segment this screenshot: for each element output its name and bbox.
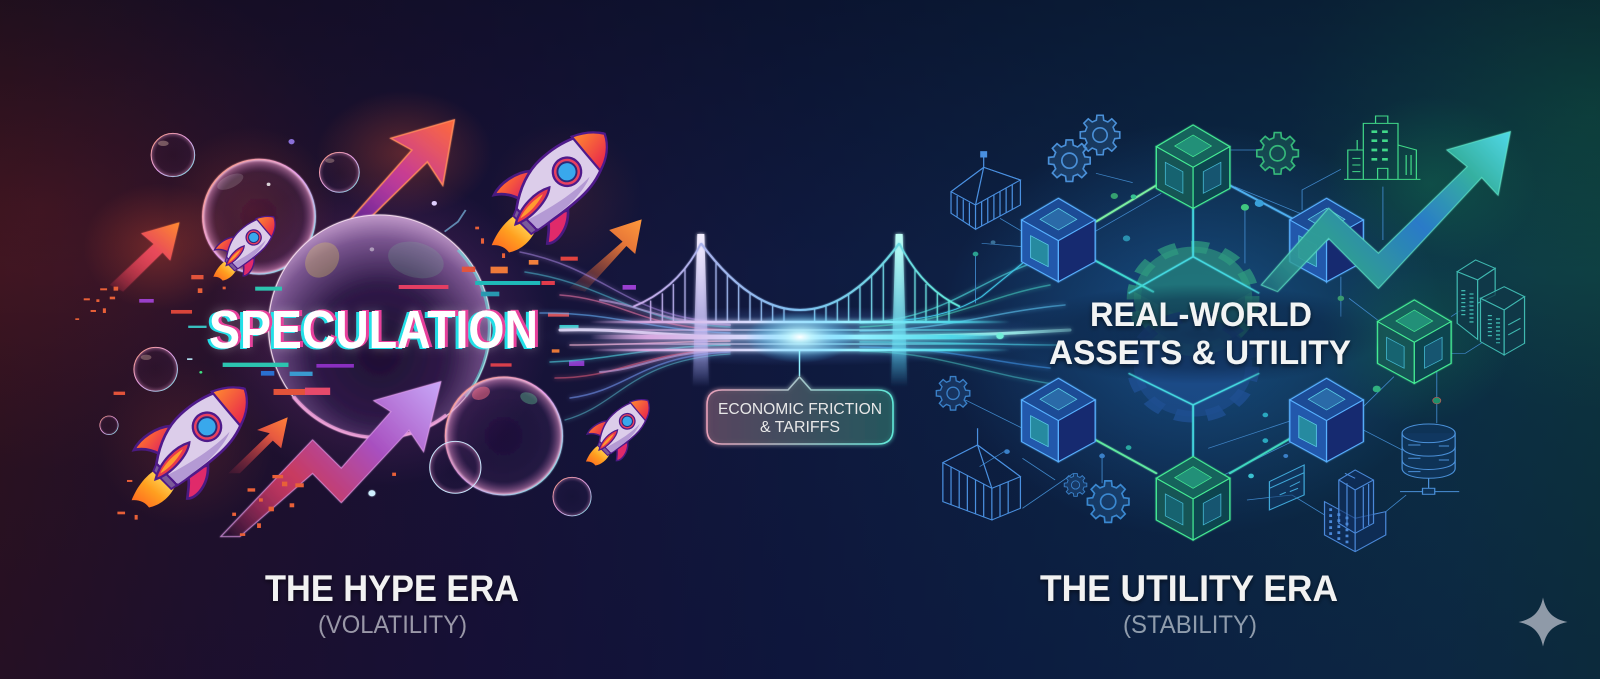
bubble: small top-left: [151, 133, 195, 177]
soft glow: [940, 97, 1537, 537]
bubble: tiny lower-left: [100, 416, 118, 435]
panel: suspension bridge: [633, 234, 960, 387]
callout: economic friction and tariffs: [707, 350, 893, 444]
icon: rocket small right: [573, 384, 661, 478]
icon: document card: [1269, 465, 1304, 510]
bubble: left lower: [134, 347, 177, 391]
cube: lower-left blue: [1022, 378, 1095, 462]
arrow: right upward: [569, 219, 642, 292]
icon: rocket inside bubble: [201, 201, 286, 293]
glow halos: [83, 90, 642, 527]
bridge light band: [540, 306, 1060, 366]
bridge towers: [693, 234, 907, 387]
bubble: small top-centre: [319, 152, 359, 192]
title: the utility era: THE UTILITY ERA: [1040, 568, 1338, 609]
backbone links: [904, 175, 1316, 473]
glitch bars: [114, 257, 636, 395]
icon: shipping container lower: [943, 428, 1020, 520]
icon: rocket top-right: [468, 103, 628, 275]
cube: upper-left blue: [1022, 198, 1095, 282]
sparkle points: [187, 139, 466, 496]
bubble: main speculation bubble: [269, 215, 491, 438]
arrow: zigzag volatile growth: [221, 382, 441, 537]
glow core: [745, 311, 855, 363]
icon: shipping container upper: [951, 152, 1020, 229]
cube: right green: [1378, 300, 1451, 383]
heading: real-world assets and utility: ASSETS & UTILITY: [1049, 334, 1351, 372]
central gear: lower: [1134, 317, 1252, 417]
icon: server towers: [1457, 260, 1525, 355]
cube: top green: [1156, 125, 1230, 208]
central gear: upper: [1131, 247, 1255, 350]
panel: utility network illustration: [904, 97, 1537, 552]
callout: economic friction and tariffs: ECONOMIC FRICTION: [718, 401, 882, 418]
text backing glow: [1015, 284, 1385, 384]
arrow: large upward top: [347, 120, 454, 223]
icon: skyscraper lower: [1325, 470, 1386, 552]
bridge cables: [633, 243, 960, 322]
title: the hype era: THE HYPE ERA: [265, 568, 519, 609]
icon: database: [1400, 424, 1459, 494]
heading: speculation: SPECULATION: [209, 300, 538, 360]
panel: speculation hype illustration: [75, 90, 642, 537]
cube: upper-right blue: [1290, 198, 1363, 282]
callout: economic friction and tariffs: & TARIFFS: [760, 419, 840, 436]
heading: real-world assets and utility: REAL-WORLD: [1090, 296, 1312, 334]
link dots: [973, 193, 1441, 478]
gears: [936, 115, 1298, 522]
heading: real-world assets and utility: [1049, 296, 1351, 372]
bubble: medium with rocket: [203, 159, 315, 274]
cube: bottom green: [1156, 457, 1230, 540]
subtitle: stability: (STABILITY): [1123, 611, 1257, 639]
thin circuit links: [965, 150, 1484, 515]
icon: office buildings green: [1344, 116, 1420, 179]
bridge deck light lines: [590, 322, 1010, 350]
bubble: overlapping small: [430, 441, 481, 493]
arrow: left upward: [110, 222, 179, 292]
stream lines converging into the bridge: [520, 252, 730, 420]
bubble: lower-right tiny: [553, 477, 591, 516]
bubble: lower-right large: [445, 377, 562, 495]
particles: [75, 227, 505, 536]
subtitle: volatility: (VOLATILITY): [318, 611, 467, 639]
icon: arrow stable growth: [1261, 132, 1510, 292]
hub lines: [1129, 207, 1259, 457]
arrow: small lower orange: [228, 417, 288, 473]
cube: lower-right blue: [1290, 378, 1363, 462]
icon: sparkle mark: [1518, 598, 1568, 646]
icon: rocket bottom-left: [108, 358, 268, 530]
stream lines leaving the bridge: [860, 262, 1070, 385]
